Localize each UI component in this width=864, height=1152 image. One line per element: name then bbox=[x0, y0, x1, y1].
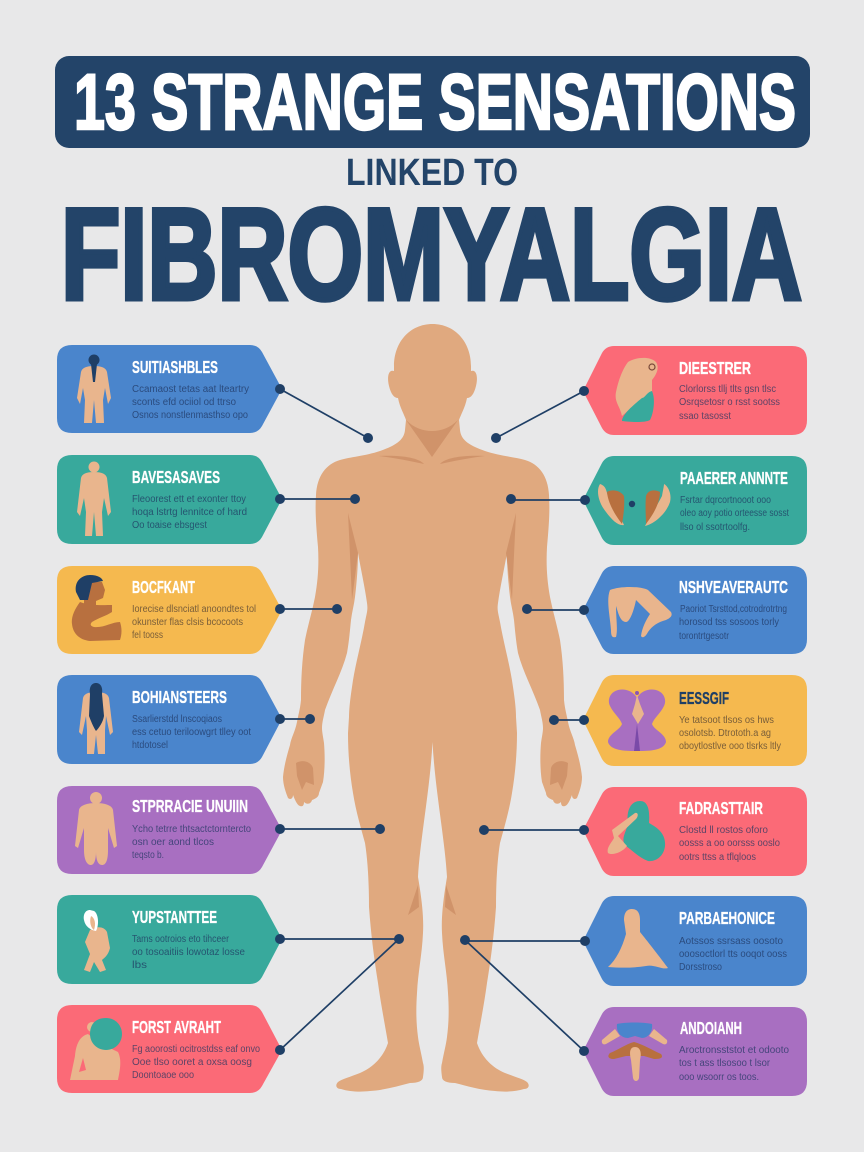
body text: Clostd ll rostos oforo bbox=[679, 825, 768, 836]
icon: purple pelvis bbox=[608, 689, 666, 751]
body text bbox=[132, 824, 251, 861]
body text: sconts efd ociiol od ttrso bbox=[132, 397, 236, 408]
body text: Iorecise dlsnciatl anoondtes tol bbox=[132, 604, 256, 615]
body text: teqsto b. bbox=[132, 850, 164, 861]
panel: left 2 bbox=[57, 455, 282, 544]
heading: FADRASTTAIR bbox=[679, 798, 763, 818]
icon: torso with bent arm bbox=[72, 575, 122, 641]
body text bbox=[679, 604, 787, 642]
body text bbox=[132, 604, 256, 641]
body text bbox=[679, 936, 787, 973]
body text: ootrs ttss a tflqloos bbox=[679, 852, 756, 863]
body text: okunster flas clsis bcocoots bbox=[132, 617, 243, 628]
human body figure bbox=[283, 324, 582, 1092]
body text: htdotosel bbox=[132, 740, 168, 751]
heading: BOCFKANT bbox=[132, 577, 195, 597]
heading: YUPSTANTTEE bbox=[132, 907, 217, 927]
heading: ANDOIANH bbox=[680, 1018, 742, 1038]
body text: Clorlorss tllj tlts gsn tlsc bbox=[679, 384, 776, 395]
heading: EESSGIF bbox=[679, 688, 729, 708]
panel: left 7 bbox=[57, 1005, 282, 1093]
body text: Fg aoorosti ocitrostdss eaf onvo bbox=[132, 1044, 260, 1055]
panel: right 3 bbox=[583, 566, 807, 654]
panel: left 3 bbox=[57, 566, 282, 654]
body text: Aroctronsststot et odooto bbox=[679, 1045, 789, 1056]
icon: figure with braid bbox=[77, 354, 111, 423]
body text bbox=[132, 714, 251, 751]
icon: back figure bbox=[75, 792, 117, 865]
body text: Ssarlierstdd lnscoqiaos bbox=[132, 714, 222, 725]
palm details bbox=[296, 761, 568, 790]
armpit shadows bbox=[348, 513, 516, 600]
neck shadow bbox=[406, 420, 458, 457]
body text: osn oer aond tlcos bbox=[132, 837, 214, 848]
icon: hunched figure bbox=[84, 910, 110, 972]
icon: bent limb bbox=[608, 587, 672, 637]
heading: BAVESASAVES bbox=[132, 467, 220, 487]
panel: left 4 bbox=[57, 675, 282, 764]
body text: Dorsstroso bbox=[679, 962, 722, 973]
body text: ooo wsoorr os toos. bbox=[679, 1072, 759, 1083]
heading: FORST AVRAHT bbox=[132, 1017, 221, 1037]
body text bbox=[132, 1044, 260, 1081]
knee shadows bbox=[408, 885, 456, 915]
body text: ess cetuo teriloowgrt tlley oot bbox=[132, 727, 251, 738]
panel: right 6 bbox=[583, 896, 807, 986]
heading: PARBAEHONICE bbox=[679, 908, 775, 928]
icon: head in profile bbox=[616, 358, 658, 422]
panel: right 7 bbox=[583, 1007, 807, 1096]
panel: left 5 bbox=[57, 786, 282, 874]
body text: Osnos nonstlenmasthso opo bbox=[132, 410, 248, 421]
body text: oboytlostlve ooo tlsrks ltly bbox=[679, 741, 781, 752]
body text: ooosoctlorl tts ooqot ooss bbox=[679, 949, 787, 960]
body text: Ye tatsoot tlsos os hws bbox=[679, 715, 774, 726]
subtitle: LINKED TO bbox=[346, 152, 518, 194]
heading: NSHVEAVERAUTC bbox=[679, 577, 788, 597]
icon: seated figure bbox=[608, 909, 668, 968]
heading: PAAERER ANNNTE bbox=[680, 468, 788, 488]
title banner bbox=[55, 56, 810, 148]
body text bbox=[132, 384, 249, 421]
body text: horosod tss sosoos torly bbox=[679, 617, 779, 628]
icon: pair of ears bbox=[598, 484, 671, 526]
heading: DIEESTRER bbox=[679, 358, 751, 378]
heading: BOHIANSTEERS bbox=[132, 687, 227, 707]
body text: Oo toaise ebsgest bbox=[132, 520, 207, 531]
body text: Aotssos ssrsass oosoto bbox=[679, 936, 783, 947]
body text bbox=[132, 934, 245, 971]
body text: Ooe tlso ooret a oxsa oosg bbox=[132, 1057, 252, 1068]
body text bbox=[679, 825, 780, 863]
icon: figure with long hair bbox=[79, 683, 113, 754]
body text bbox=[132, 494, 247, 531]
heading: STPRRACIE UNUIIN bbox=[132, 796, 248, 816]
body text bbox=[679, 1045, 789, 1083]
body text: Osrqsetosr o rsst sootss bbox=[679, 397, 780, 408]
body text: lbs bbox=[132, 960, 147, 971]
icon: teal organ and skin shape bbox=[608, 801, 665, 861]
body text: llso ol ssotrtoolfg. bbox=[680, 522, 750, 533]
connector lines and dots: left bbox=[275, 384, 404, 1055]
panel: right 1 bbox=[583, 346, 807, 435]
icon: standing figure bbox=[77, 462, 111, 536]
heading: SUITIASHBLES bbox=[132, 357, 218, 377]
body text: torontrtgesotr bbox=[679, 631, 730, 642]
panel: right 4 bbox=[583, 675, 807, 766]
body text: Ycho tetrre thtsactctorntercto bbox=[132, 824, 251, 835]
body text: Doontoaoe ooo bbox=[132, 1070, 194, 1081]
icon: abdominal shapes bbox=[602, 1022, 667, 1081]
panel: right 2 bbox=[583, 456, 807, 545]
body text: oo tosoaitiis lowotaz losse bbox=[132, 947, 245, 958]
body text: osolotsb. Dtrototh.a ag bbox=[679, 728, 771, 739]
body text bbox=[679, 384, 780, 422]
body text bbox=[679, 715, 781, 752]
panel: left 1 bbox=[57, 345, 282, 433]
body text: fel tooss bbox=[132, 630, 163, 641]
icon: shoulder with teal head bbox=[70, 1018, 122, 1080]
body text: hoqa lstrtg lennitce of hard bbox=[132, 507, 247, 518]
body text: tos t ass tlsosoo t lsor bbox=[679, 1058, 771, 1069]
body text: Ccamaost tetas aat lteartry bbox=[132, 384, 249, 395]
body text: Paoriot Tsrsttod,cotrodrotrtng bbox=[680, 604, 787, 615]
collarbones bbox=[379, 456, 485, 464]
body text: ssao tasosst bbox=[679, 411, 731, 422]
body text: oleo aoy potio orteesse sosst bbox=[680, 508, 789, 519]
body text: Fsrtar dqrcortnooot ooo bbox=[680, 495, 771, 506]
body text bbox=[680, 495, 789, 533]
body text: Tams ootroios eto tihceer bbox=[132, 934, 230, 945]
panel: left 6 bbox=[57, 895, 282, 984]
body text: Fleoorest ett et exonter ttoy bbox=[132, 494, 246, 505]
connector lines and dots: right bbox=[460, 386, 590, 1056]
body text: oosss a oo oorsss ooslo bbox=[679, 838, 780, 849]
panel: right 5 bbox=[583, 787, 807, 876]
